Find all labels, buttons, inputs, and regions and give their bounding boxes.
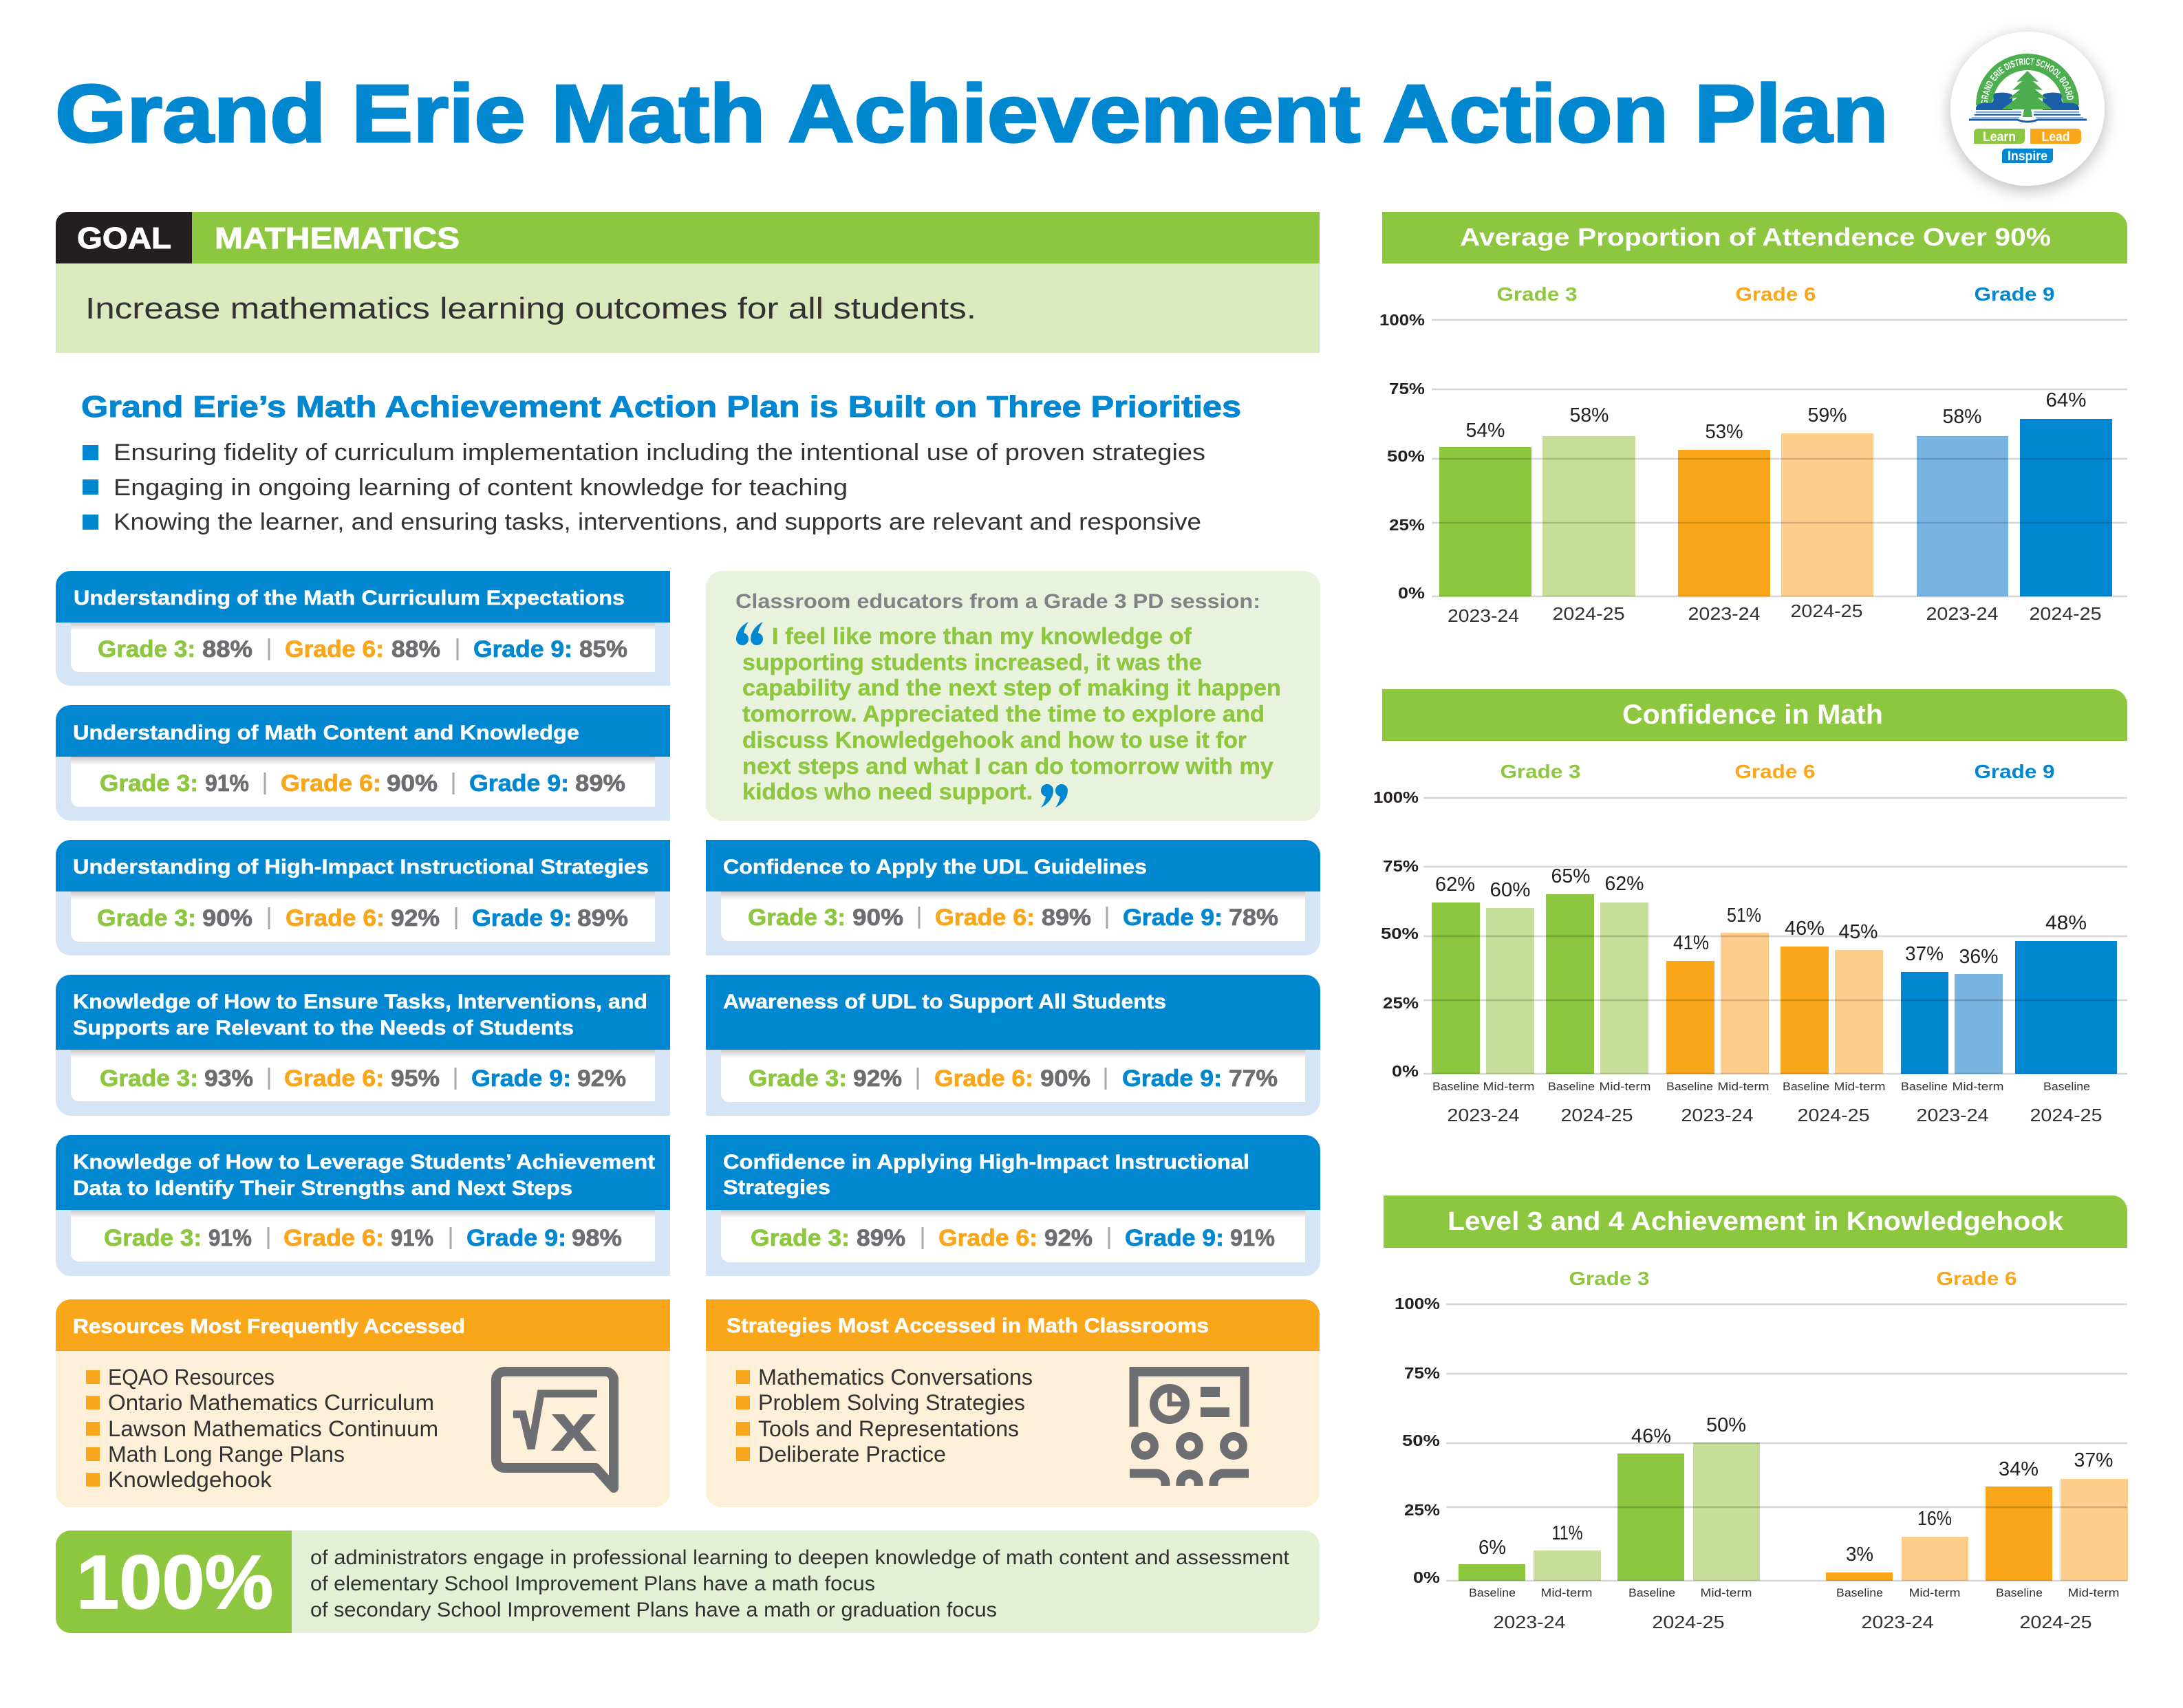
quote heading: Classroom educators from a Grade 3 PD session: [735,590,1260,613]
y axis labels [1373,788,1419,1080]
value labels: 41% [1673,932,1709,954]
chart heading [1382,689,2127,741]
panel: content and knowledge: 91% [205,770,249,797]
resources list: Knowledgehook [108,1467,272,1492]
measure labels: Mid-term [1908,1586,1961,1599]
grade labels: Grade 9 [1975,761,2054,782]
goal label [56,212,192,263]
value labels [1465,389,2086,443]
measure labels: Mid-term [1717,1080,1770,1093]
value labels: 60% [1490,879,1530,901]
year labels: 2023-24 [1917,1105,1988,1125]
panel: high-impact strategies understanding [56,840,670,955]
panel: UDL confidence: Grade 9: [1123,905,1223,931]
year labels: 2023-24 [1493,1612,1566,1632]
y axis labels [1379,311,1425,602]
panel: UDL awareness: Grade 3: [749,1066,847,1092]
panel: content and knowledge [56,705,670,821]
logo pill: Lead [2030,129,2081,144]
panel: UDL confidence: 90% [852,905,903,931]
year labels: 2023-24 [1681,1105,1753,1125]
strategies list [736,1365,1033,1467]
panel: content and knowledge: 89% [575,770,625,797]
panel: high-impact strategies confidence: Grade 3: [751,1225,850,1251]
panel: resources [56,1299,670,1507]
panel: high-impact strategies confidence: 92% [1044,1225,1093,1251]
chart heading: Confidence in Math [1622,700,1883,730]
panel: curriculum expectations: 88% [391,636,440,662]
panel: content and knowledge: 90% [387,770,438,797]
panel: strategies [706,1299,1320,1507]
panel: curriculum expectations: Understanding of the Math Curriculum Expectations [74,587,625,609]
value labels: 46% [1631,1425,1671,1447]
value labels: 37% [1905,943,1944,965]
icon: opening quote mark [736,622,763,645]
resources list: Ontario Mathematics Curriculum [108,1390,434,1415]
value labels: 58% [1570,404,1609,426]
goal subject bar [192,212,1320,263]
year labels: 2023-24 [1448,1105,1519,1125]
chart heading [1384,1196,2127,1248]
panel: UDL confidence: Confidence to Apply the UDL Guidelines [723,856,1147,878]
measure labels: Baseline [2043,1080,2090,1093]
year labels: 2024-25 [2030,603,2101,624]
y axis labels: 50% [1402,1431,1440,1449]
measure labels: Mid-term [1953,1080,2003,1093]
panel: high-impact strategies confidence [706,1135,1320,1276]
priorities list: Ensuring fidelity of curriculum implementation including the intentional use of proven strategies [114,440,1205,466]
logo badge [1942,27,2114,199]
callout statements: of secondary School Improvement Plans have a math or graduation focus [310,1599,997,1621]
panel: curriculum expectations [56,571,670,686]
measure labels: Baseline [1548,1080,1595,1093]
panel: UDL confidence: 78% [1229,905,1278,931]
grade labels [1569,1268,2017,1289]
grade labels: Grade 6 [1936,1268,2017,1289]
value labels: 34% [1999,1458,2039,1480]
value labels: 3% [1846,1544,1873,1566]
panel: achievement data knowledge [56,1135,670,1276]
panel: relevant tasks knowledge: 92% [577,1066,626,1092]
measure labels: Mid-term [1701,1586,1752,1599]
panel: achievement data knowledge: Grade 6: [283,1225,384,1251]
priorities list: Knowing the learner, and ensuring tasks, interventions, and supports are relevant and responsive [114,509,1201,535]
panel: content and knowledge: Grade 3: [100,770,198,797]
measure labels [1469,1586,2119,1599]
panel: curriculum expectations: 85% [579,636,627,662]
measure labels: Mid-term [1599,1080,1651,1093]
panel: high-impact strategies understanding: 92% [391,905,440,931]
measure labels: Mid-term [1834,1080,1885,1093]
logo: board name: GRAND ERIE DISTRICT SCHOOL BOARD [1981,58,2074,103]
value labels: 54% [1465,420,1505,442]
panel: goal [56,212,1320,353]
y axis labels: 50% [1381,925,1419,942]
value labels: 65% [1551,865,1591,887]
value labels [1478,1414,2114,1566]
panel: achievement data knowledge: 91% [208,1225,252,1251]
panel: relevant tasks knowledge: Grade 9: [471,1066,571,1092]
logo pill: Inspire: Inspire [2008,149,2047,164]
panel: 100 percent callout [56,1531,1320,1633]
panel: high-impact strategies confidence: Strategies [723,1176,830,1199]
quote text: tomorrow. Appreciated the time to explore and [742,701,1265,726]
quote text: next steps and what I can do tomorrow with my [742,753,1274,779]
chart: attendance [1379,212,2127,626]
y axis labels: 0% [1413,1568,1440,1586]
year labels [1493,1612,2091,1632]
value labels: 58% [1943,406,1981,428]
priorities list: Engaging in ongoing learning of content knowledge for teaching [114,475,848,501]
year labels: 2023-24 [1448,605,1519,626]
panel: UDL confidence: 89% [1042,905,1091,931]
panel: strategies: Strategies Most Accessed in Math Classrooms [727,1315,1209,1337]
panel: achievement data knowledge: Grade 9: [466,1225,566,1251]
measure labels [1432,1080,2090,1093]
panel: curriculum expectations: Grade 3: [98,636,195,662]
value labels: 45% [1838,921,1878,943]
quote text: capability and the next step of making it happen [742,675,1281,700]
y axis labels: 100% [1373,788,1419,806]
value labels: 62% [1604,873,1644,895]
resources list: EQAO Resources [108,1365,275,1390]
quote text: supporting students increased, it was the [742,649,1202,675]
quote text: I feel like more than my knowledge of [772,623,1192,649]
panel: UDL awareness: 90% [1040,1066,1090,1092]
goal subject bar: MATHEMATICS [215,221,460,255]
measure labels: Mid-term [2068,1586,2119,1599]
year labels [1448,1105,2103,1125]
logo pill: Learn: Learn [1983,130,2016,144]
panel: content and knowledge: Understanding of Math Content and Knowledge [73,722,579,744]
quote text [742,623,1281,804]
panel: achievement data knowledge: Data to Identify Their Strengths and Next Steps [73,1177,572,1200]
title: Grand Erie Math Achievement Action Plan [55,68,1889,160]
panel: relevant tasks knowledge [56,975,670,1116]
grade labels: Grade 9 [1975,283,2054,305]
panel: 100 percent callout: 100% [76,1540,273,1625]
strategies list: Mathematics Conversations [758,1365,1033,1390]
strategies list: Problem Solving Strategies [758,1390,1025,1415]
panel: relevant tasks knowledge: 95% [391,1066,440,1092]
year labels: 2024-25 [1560,1105,1633,1125]
panel: high-impact strategies understanding: 90% [202,905,252,931]
panel: curriculum expectations: Grade 6: [285,636,384,662]
y axis labels: 100% [1379,311,1425,329]
grade labels: Grade 3 [1497,283,1577,305]
panel: UDL confidence: Grade 6: [935,905,1035,931]
y axis labels: 25% [1404,1501,1440,1519]
callout statements [310,1546,1290,1621]
grade labels: Grade 6 [1735,283,1816,305]
panel: high-impact strategies understanding: Understanding of High-Impact Instructional Strategies [73,856,649,878]
panel: high-impact strategies understanding: 89% [577,905,628,931]
callout statements: of administrators engage in professional learning to deepen knowledge of math content and assessment [310,1546,1290,1569]
value labels: 48% [2045,912,2087,934]
resources list: Math Long Range Plans [108,1442,345,1467]
resources list: Lawson Mathematics Continuum [108,1416,438,1441]
grade labels: Grade 3 [1500,761,1581,782]
panel: UDL confidence [706,840,1320,955]
y axis labels [1395,1295,1440,1586]
y axis labels: 25% [1383,994,1419,1012]
panel: relevant tasks knowledge: 93% [204,1066,253,1092]
quote text: kiddos who need support. [742,779,1033,804]
logo: tree [2002,71,2052,117]
logo: waves [1976,93,2079,110]
year labels [1448,601,2101,626]
year labels: 2024-25 [1552,603,1625,624]
y axis labels: 75% [1404,1364,1440,1382]
measure labels: Baseline [1469,1586,1516,1599]
y axis labels: 75% [1383,857,1419,875]
panel: educator quote [706,571,1320,821]
y axis labels: 25% [1389,516,1425,534]
panel: UDL awareness: Grade 6: [934,1066,1033,1092]
icon: classroom board with students [1130,1367,1249,1486]
year labels: 2023-24 [1926,603,1998,624]
panel: high-impact strategies understanding: Grade 6: [286,905,385,931]
panel: high-impact strategies confidence: 91% [1230,1225,1275,1251]
y axis labels: 50% [1387,447,1425,465]
value labels: 51% [1727,905,1761,927]
measure labels: Baseline [1783,1080,1829,1093]
grade labels [1497,283,2054,305]
panel: UDL awareness: 77% [1229,1066,1278,1092]
logo pill: Lead: Lead [2042,130,2069,144]
panel: achievement data knowledge: 91% [391,1225,433,1251]
y axis labels: 75% [1389,380,1425,398]
value labels [1435,865,2087,968]
panel: relevant tasks knowledge: Supports are Relevant to the Needs of Students [73,1017,574,1039]
value labels: 53% [1705,421,1743,443]
panel: high-impact strategies confidence: Grade 6: [938,1225,1037,1251]
bars [1439,419,2112,596]
logo: book [1969,112,2087,122]
chart heading: Level 3 and 4 Achievement in Knowledgehook [1448,1207,2064,1236]
panel: high-impact strategies confidence: Confidence in Applying High-Impact Instructional [723,1151,1249,1174]
panel: content and knowledge: Grade 9: [469,770,569,797]
value labels: 37% [2074,1449,2114,1471]
y axis labels: 0% [1398,584,1425,602]
panel: achievement data knowledge: Grade 3: [104,1225,202,1251]
measure labels: Baseline [1628,1586,1675,1599]
value labels: 16% [1917,1508,1952,1530]
icon: square root speech bubble: x [550,1389,597,1466]
year labels: 2024-25 [2020,1612,2091,1632]
value labels: 46% [1785,918,1825,940]
panel: UDL awareness [706,975,1320,1116]
panel: achievement data knowledge: Knowledge of How to Leverage Students’ Achievement [73,1151,655,1174]
panel: high-impact strategies understanding: Grade 3: [97,905,196,931]
priorities heading: Grand Erie’s Math Achievement Action Plan is Built on Three Priorities [81,390,1241,424]
panel: achievement data knowledge: 98% [572,1225,622,1251]
grade labels: Grade 6 [1735,761,1815,782]
panel: UDL awareness: 92% [853,1066,902,1092]
panel: high-impact strategies understanding: Grade 9: [472,905,572,931]
y axis labels: 100% [1395,1295,1440,1312]
measure labels: Baseline [1901,1080,1948,1093]
panel: curriculum expectations: Grade 9: [473,636,572,662]
measure labels: Baseline [1996,1586,2043,1599]
measure labels: Baseline [1836,1586,1883,1599]
panel: UDL confidence: Grade 3: [748,905,846,931]
panel: UDL awareness: Grade 9: [1122,1066,1222,1092]
measure labels: Mid-term [1483,1080,1534,1093]
value labels: 50% [1706,1414,1746,1436]
priorities list [83,440,1205,535]
panel: UDL awareness: Awareness of UDL to Support All Students [723,991,1166,1013]
panel: curriculum expectations: 88% [202,636,252,662]
strategies list: Deliberate Practice [758,1442,946,1467]
year labels: 2024-25 [2030,1105,2103,1125]
value labels: 36% [1959,946,1998,968]
chart: confidence in math [1373,689,2127,1125]
panel: high-impact strategies confidence: 89% [857,1225,905,1251]
value labels: 64% [2046,389,2086,411]
panel: relevant tasks knowledge: Knowledge of How to Ensure Tasks, Interventions, and [73,991,647,1013]
callout statements: of elementary School Improvement Plans have a math focus [310,1572,875,1595]
icon: square root speech bubble [496,1372,614,1488]
measure labels: Baseline [1432,1080,1479,1093]
panel: high-impact strategies confidence: Grade 9: [1125,1225,1224,1251]
year labels: 2024-25 [1790,601,1863,621]
measure labels: Mid-term [1541,1586,1592,1599]
value labels: 6% [1478,1537,1506,1559]
panel: resources: Resources Most Frequently Accessed [73,1315,465,1338]
year labels: 2023-24 [1688,603,1760,624]
year labels: 2024-25 [1797,1105,1870,1125]
value labels: 59% [1808,404,1847,426]
y axis labels: 0% [1392,1062,1419,1080]
panel: content and knowledge: Grade 6: [281,770,381,797]
chart: knowledgehook achievement [1384,1196,2128,1632]
goal label: GOAL [77,221,171,255]
resources list [86,1365,438,1492]
bars [1432,894,2117,1074]
measure labels: Baseline [1666,1080,1713,1093]
panel: relevant tasks knowledge: Grade 6: [284,1066,384,1092]
logo: green arc [1984,62,2071,105]
year labels: 2023-24 [1862,1612,1933,1632]
chart heading: Average Proportion of Attendence Over 90% [1460,223,2051,251]
logo pill: Learn [1974,129,2025,144]
icon: closing quote mark [1041,784,1068,808]
grade labels [1500,761,2054,782]
value labels: 62% [1435,874,1475,896]
chart heading [1382,212,2127,263]
quote text: discuss Knowledgehook and how to use it for [742,727,1247,753]
panel: relevant tasks knowledge: Grade 3: [100,1066,198,1092]
grade labels: Grade 3 [1569,1268,1650,1289]
bars [1459,1442,2128,1581]
year labels: 2024-25 [1653,1612,1724,1632]
goal statement: Increase mathematics learning outcomes for all students. [85,292,976,325]
value labels: 11% [1552,1522,1582,1544]
strategies list: Tools and Representations [758,1416,1019,1441]
